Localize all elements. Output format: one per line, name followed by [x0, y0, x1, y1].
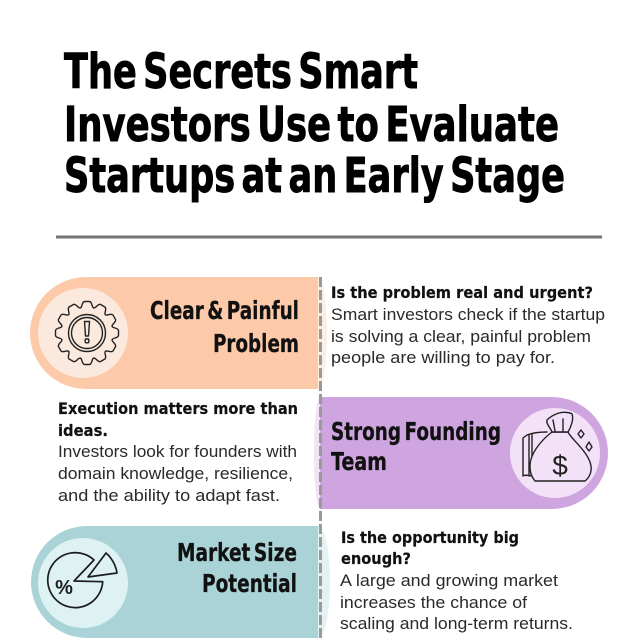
heading: market size potential	[177, 538, 297, 598]
icon: gear with exclamation mark	[38, 288, 128, 378]
title	[64, 44, 565, 204]
title: The Secrets Smart	[64, 44, 418, 100]
text block: is the problem real: Is the problem real and urgent?	[331, 283, 593, 302]
dashed center divider	[319, 277, 322, 640]
text block: execution matters: Execution matters more than	[58, 399, 298, 418]
text block: execution matters	[58, 399, 298, 505]
heading: clear and painful problem: Clear & Painful	[150, 296, 299, 325]
heading: strong founding team	[331, 417, 501, 476]
text block: execution matters: and the ability to adapt fast.	[58, 486, 280, 505]
heading: clear and painful problem	[150, 296, 299, 358]
heading: market size potential: Market Size	[177, 538, 297, 567]
text block: is the opportunity big enough: scaling and long-term returns.	[340, 614, 573, 633]
text block: execution matters: Investors look for founders with	[58, 442, 297, 461]
panel: market size potential banner	[31, 526, 330, 638]
text block: is the opportunity big enough: enough?	[341, 549, 411, 568]
heading: strong founding team: Strong Founding	[331, 417, 501, 446]
icon: money bag	[510, 408, 600, 498]
text block: is the opportunity big enough	[340, 528, 573, 633]
heading: clear and painful problem: Problem	[213, 329, 299, 358]
text block: execution matters: ideas.	[58, 421, 108, 440]
panel: clear and painful problem banner	[30, 277, 327, 389]
panel: strong founding team banner	[314, 397, 608, 509]
heading: strong founding team: Team	[331, 447, 387, 476]
icon: money bag: $	[552, 450, 568, 481]
icon: pie chart with percent: %	[55, 577, 73, 599]
heading: market size potential: Potential	[202, 569, 297, 598]
text block: is the problem real: people are willing to pay for.	[331, 348, 555, 367]
text block: is the problem real	[331, 283, 605, 367]
text block: is the problem real: is solving a clear, painful problem	[331, 327, 591, 346]
text block: is the opportunity big enough: increases the chance of	[340, 593, 527, 612]
text block: is the problem real: Smart investors check if the startup	[331, 305, 605, 324]
text block: is the opportunity big enough: A large and growing market	[340, 571, 558, 590]
text block: is the opportunity big enough: Is the opportunity big	[341, 528, 519, 547]
icon: pie chart with percent	[38, 538, 128, 628]
text block: execution matters: domain knowledge, resilience,	[58, 464, 293, 483]
